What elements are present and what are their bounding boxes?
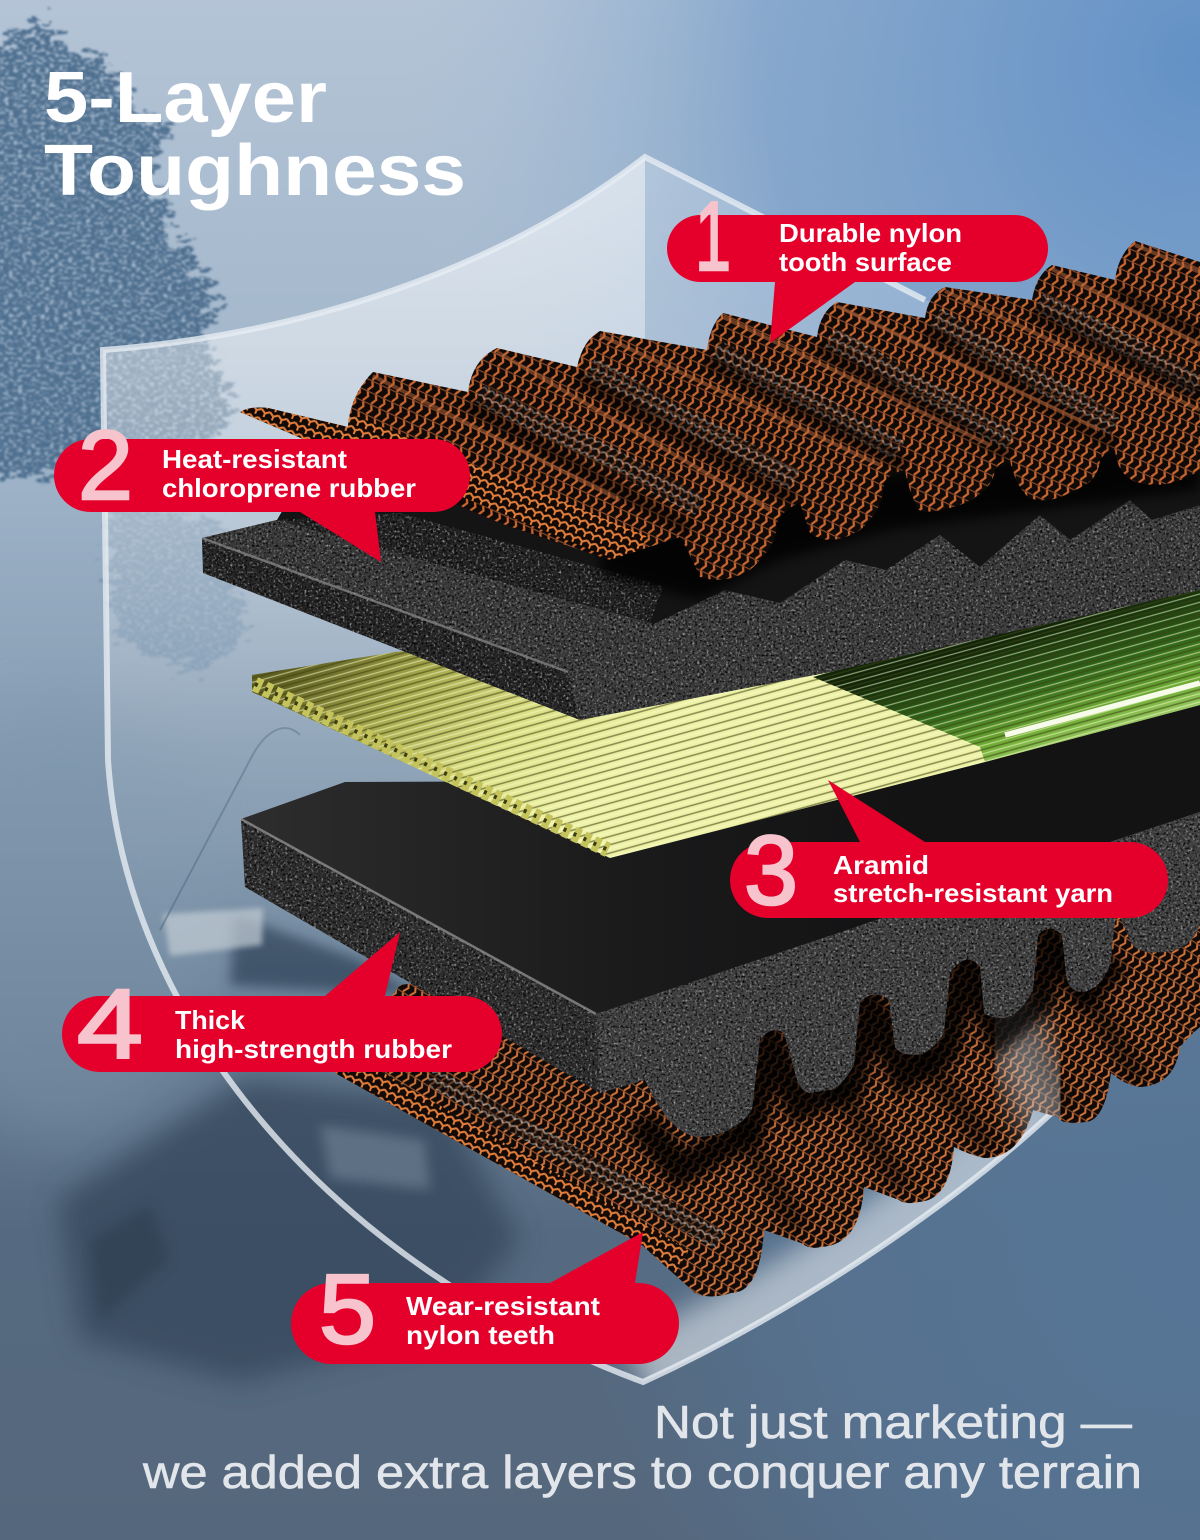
callout 1 text	[779, 218, 962, 277]
callout 4 text	[175, 1005, 452, 1064]
yarn highlight	[1005, 683, 1200, 735]
callout 5 text	[406, 1291, 600, 1350]
callout 2	[54, 410, 470, 562]
closing tagline: Not just marketing —	[654, 1396, 1132, 1448]
callout 2 text: Heat-resistant	[162, 444, 347, 474]
upper rubber left face	[202, 538, 580, 720]
layer 5: bottom nylon teeth	[335, 918, 1200, 1296]
callout 3 text	[833, 850, 1113, 908]
callout 2 text	[162, 444, 416, 503]
callout 3 text: Aramid	[833, 850, 929, 880]
callout 2 number: 2	[78, 410, 133, 520]
layer 3: aramid yarn	[252, 560, 1200, 858]
title: Toughness	[44, 131, 466, 211]
rubber left face	[241, 819, 600, 1093]
title: 5-Layer	[44, 58, 327, 138]
callout 4 text: high-strength rubber	[175, 1034, 452, 1064]
callout 5 number: 5	[319, 1254, 376, 1364]
callout 2 text: chloroprene rubber	[162, 473, 416, 503]
callout 4 text: Thick	[175, 1005, 246, 1035]
callout 4 number: 4	[77, 969, 143, 1079]
callout 3 number: 3	[744, 815, 798, 925]
upper rubber top face	[202, 420, 1200, 672]
callout 3	[730, 780, 1168, 925]
callout 1	[667, 181, 1048, 343]
snowcat vehicle silhouette	[58, 728, 520, 1382]
shield outline	[100, 154, 1053, 1386]
layer 4: thick rubber	[241, 690, 1200, 1137]
callout 1 text: Durable nylon	[779, 218, 962, 248]
layer 1: top nylon teeth	[235, 235, 1200, 600]
callout 1 text: tooth surface	[779, 247, 952, 277]
callout 4	[62, 932, 502, 1079]
rubber top face	[241, 690, 1200, 1014]
layer 2: chloroprene rubber	[202, 420, 1200, 720]
green coated yarn end	[813, 560, 1200, 762]
upper rubber right face	[568, 500, 1200, 720]
upper rubber ridge	[202, 520, 662, 672]
closing tagline: we added extra layers to conquer any terrain	[142, 1446, 1142, 1498]
callout 1 number: 1	[695, 181, 731, 291]
callout 5	[291, 1232, 679, 1364]
callout 5 text: nylon teeth	[406, 1320, 555, 1350]
rubber toothed front face	[596, 812, 1200, 1137]
closing tagline	[142, 1396, 1142, 1498]
title	[44, 58, 466, 211]
callout 5 text: Wear-resistant	[406, 1291, 600, 1321]
callout 3 text: stretch-resistant yarn	[833, 878, 1113, 908]
snowy fir tree	[0, 20, 250, 675]
